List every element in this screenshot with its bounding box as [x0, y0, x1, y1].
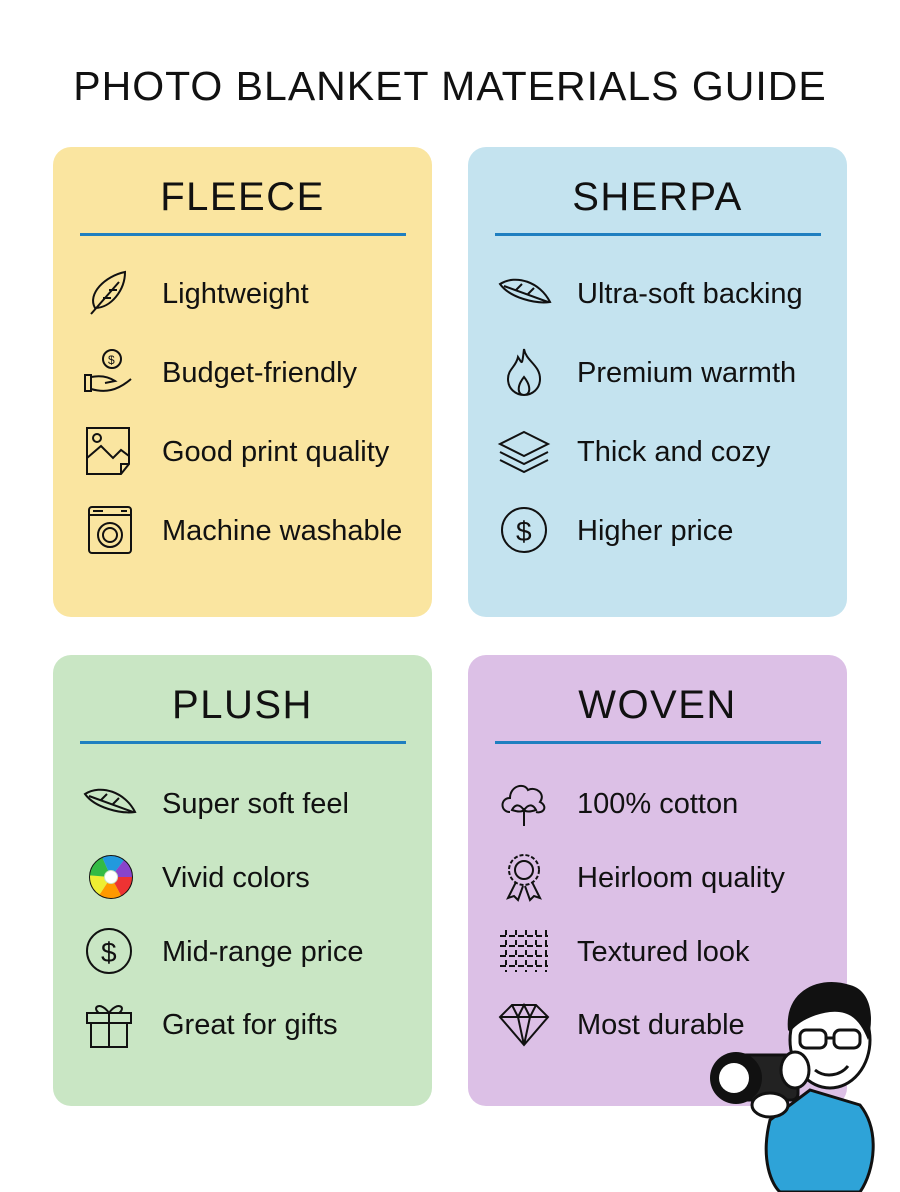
body [766, 1090, 873, 1192]
row: warmth: Premium warmth [577, 357, 796, 389]
panel: fleece [53, 147, 432, 617]
row: cotton: 100% cotton [577, 788, 738, 820]
icon: photographer character [710, 982, 875, 1192]
row: washable: Machine washable [162, 515, 402, 547]
row: print [86, 427, 390, 475]
row: durable [498, 1002, 745, 1046]
heading: plush: PLUSH [172, 683, 313, 727]
row: heirloom [506, 854, 785, 902]
heading: woven: WOVEN [578, 683, 737, 727]
panel: sherpa [468, 147, 847, 617]
title: PHOTO BLANKET MATERIALS GUIDE [73, 63, 827, 109]
row: budget: $ [108, 353, 115, 367]
row: textured [500, 930, 750, 972]
panel: woven [468, 655, 847, 1106]
row: warmth [507, 348, 796, 396]
row: gifts [86, 1005, 338, 1048]
heading: fleece: FLEECE [160, 175, 325, 219]
row: gifts: Great for gifts [162, 1009, 338, 1041]
row: vivid colors [89, 855, 310, 899]
row: super soft: Super soft feel [162, 788, 349, 820]
row: textured: Textured look [577, 936, 750, 968]
hair [788, 982, 871, 1040]
panel: plush [53, 655, 432, 1106]
row: cotton [502, 784, 738, 826]
hands [781, 1052, 809, 1088]
row: budget: Budget-friendly [162, 357, 357, 389]
row: ultra-soft: Ultra-soft backing [577, 278, 803, 310]
heading: sherpa: SHERPA [572, 175, 743, 219]
row: budget [84, 349, 357, 392]
row: washable [88, 506, 402, 554]
row: print: Good print quality [162, 436, 389, 468]
row: thick [498, 430, 770, 474]
row: price [501, 507, 733, 553]
row: price: $ [516, 516, 532, 547]
face [790, 992, 870, 1088]
row: durable: Most durable [577, 1009, 745, 1041]
row: heirloom: Heirloom quality [577, 862, 785, 894]
row: mid-range: $ [101, 937, 117, 968]
row: lightweight: Lightweight [162, 278, 309, 310]
row: vivid colors: Vivid colors [162, 862, 310, 894]
row: mid-range: Mid-range price [162, 936, 363, 968]
row: price: Higher price [577, 515, 733, 547]
row: thick: Thick and cozy [577, 436, 770, 468]
row: lightweight [90, 270, 309, 315]
camera [740, 1055, 798, 1100]
row: mid-range [86, 928, 363, 974]
glasses [800, 1030, 826, 1048]
